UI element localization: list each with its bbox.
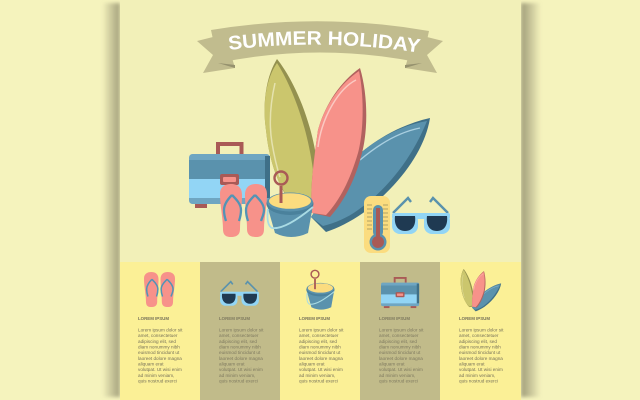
column 5 text: laoreet dolore magna [459, 356, 503, 361]
column 2 text: volutpat. Ut wisi enim [219, 367, 263, 372]
column 4 text: aliquam erat [379, 362, 405, 366]
column 5 text: Lorem ipsum dolor sit [459, 328, 504, 332]
icon: bucket small [306, 270, 334, 310]
column 5 text: diam nonummy nibh [459, 344, 501, 350]
column 1 text: adipiscing elit, sed [138, 339, 176, 344]
column 3 text: diam nonummy nibh [299, 344, 341, 350]
column 2 heading: LOREM IPSUM [219, 316, 250, 321]
column 4 text: ad minim veniam, [379, 373, 415, 378]
column 1 text: aliquam erat [138, 362, 164, 366]
main panel [120, 0, 521, 262]
column 5 text: ad minim veniam, [459, 373, 495, 378]
column 5 text: adipiscing elit, sed [459, 339, 497, 344]
column 1 text: euismod tincidunt ut [138, 350, 180, 355]
column 1 text: quis nostrud exerci [138, 378, 177, 384]
icon: surfboards small [461, 269, 501, 311]
column 2 text: aliquam erat [219, 362, 245, 366]
column 4: suitcase [379, 278, 424, 384]
column 5 text: amet, consectetuer [459, 333, 499, 338]
right panel shadow [521, 3, 541, 397]
column 3 text: adipiscing elit, sed [299, 339, 337, 344]
column 3 text: Lorem ipsum dolor sit [299, 328, 344, 332]
flip flops [220, 184, 267, 237]
column 2 text: diam nonummy nibh [219, 344, 261, 350]
column 5: surfboards [459, 269, 504, 384]
column 4 text: quis nostrud exerci [379, 378, 418, 384]
title: SUMMER HOLIDAY [229, 31, 421, 52]
column 1: flip flops [138, 272, 183, 384]
column 3 text: laoreet dolore magna [299, 356, 343, 361]
column 3 text: volutpat. Ut wisi enim [299, 367, 343, 372]
column 2 text: quis nostrud exerci [219, 378, 258, 384]
column 1 text: laoreet dolore magna [138, 356, 182, 361]
column 4 text: Lorem ipsum dolor sit [379, 328, 424, 332]
column 4 text: euismod tincidunt ut [379, 350, 421, 355]
surfboards [265, 59, 430, 232]
icon: flip flops [144, 272, 175, 307]
sunglasses [392, 198, 450, 234]
column 3 text: aliquam erat [299, 362, 325, 366]
column 3 heading: LOREM IPSUM [299, 316, 330, 321]
bottom strip [120, 262, 521, 400]
banner [197, 21, 443, 73]
thermometer [364, 196, 390, 253]
left panel shadow [102, 3, 120, 397]
column 1 text: Lorem ipsum dolor sit [138, 328, 183, 332]
suitcase [189, 144, 270, 208]
column 4 heading: LOREM IPSUM [379, 316, 410, 321]
icon: sunglasses small [220, 282, 259, 306]
column 4 text: volutpat. Ut wisi enim [379, 367, 423, 372]
column 3 text: euismod tincidunt ut [299, 350, 341, 355]
column 2 text: laoreet dolore magna [219, 356, 263, 361]
column 4 text: diam nonummy nibh [379, 344, 421, 350]
column 1 text: diam nonummy nibh [138, 344, 180, 350]
column 1 text: ad minim veniam, [138, 373, 174, 378]
column 5 text: aliquam erat [459, 362, 485, 366]
column 2: sunglasses [219, 282, 264, 384]
column 1 heading: LOREM IPSUM [138, 316, 169, 321]
column 4 text: laoreet dolore magna [379, 356, 423, 361]
column 3 text: ad minim veniam, [299, 373, 335, 378]
column 2 text: ad minim veniam, [219, 373, 255, 378]
column 1 text: volutpat. Ut wisi enim [138, 367, 182, 372]
column 3 text: amet, consectetuer [299, 333, 339, 338]
column 3 text: quis nostrud exerci [299, 378, 338, 384]
column 5 text: euismod tincidunt ut [459, 350, 501, 355]
column 4 text: adipiscing elit, sed [379, 339, 417, 344]
column 2 text: euismod tincidunt ut [219, 350, 261, 355]
column 5 text: quis nostrud exerci [459, 378, 498, 384]
bucket [266, 172, 314, 237]
column 2 text: amet, consectetuer [219, 333, 259, 338]
icon: suitcase small [381, 278, 419, 308]
column 3: bucket [299, 270, 344, 384]
column 2 text: adipiscing elit, sed [219, 339, 257, 344]
column 5 text: volutpat. Ut wisi enim [459, 367, 503, 372]
column 5 heading: LOREM IPSUM [459, 316, 490, 321]
column 4 text: amet, consectetuer [379, 333, 419, 338]
column 2 text: Lorem ipsum dolor sit [219, 328, 264, 332]
column 1 text: amet, consectetuer [138, 333, 178, 338]
